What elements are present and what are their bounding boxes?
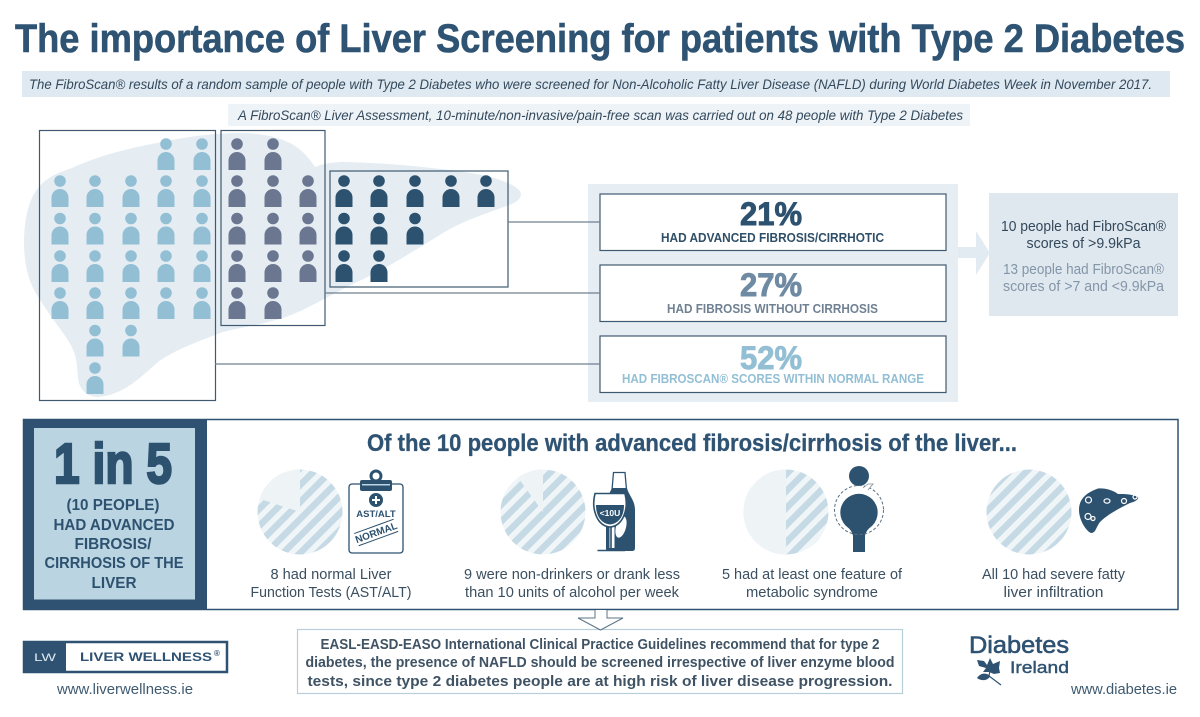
caption (982, 567, 1126, 601)
item: normal liver function tests (250, 470, 412, 601)
Diabetes Ireland URL: www.diabetes.ie (1070, 682, 1177, 698)
advanced fibrosis section frame (24, 420, 1178, 610)
item: alcohol (464, 469, 680, 601)
result: 21%: HAD ADVANCED FIBROSIS/CIRRHOTIC (661, 230, 885, 245)
1 in 5 panel: (10 PEOPLE) (66, 497, 160, 514)
1 in 5 panel: FIBROSIS/ (74, 536, 152, 553)
caption: 8 had normal Liver (270, 567, 392, 583)
icon: clipboard: NORMAL (354, 521, 399, 546)
FibroScan score box (989, 193, 1178, 316)
FibroScan score box: 13 people had FibroScan® (1003, 262, 1164, 278)
result: 21%: 21% (740, 196, 802, 232)
guidelines callout (298, 610, 902, 694)
caption (722, 567, 903, 601)
1 in 5 panel: LIVER (92, 575, 137, 592)
icon: fatty liver (1079, 488, 1138, 533)
1 in 5 panel: CIRRHOSIS OF THE (44, 555, 184, 572)
result: 52%: HAD FIBROSCAN® SCORES WITHIN NORMAL RANGE (622, 371, 924, 386)
guidelines callout: tests, since type 2 diabetes people are at high risk of liver disease progression. (308, 674, 892, 690)
icon: wine glass and bottle: <10U (600, 508, 620, 518)
logo: Diabetes Ireland: Diabetes (969, 632, 1069, 659)
subtitle band (22, 71, 1170, 97)
1 in 5 panel: 1 in 5 (54, 432, 172, 496)
guidelines callout: EASL-EASD-EASO International Clinical Practice Guidelines recommend that for type 2 (320, 637, 880, 653)
FibroScan score box: scores of >9.9kPa (1026, 236, 1141, 252)
group box: fibrosis people (221, 130, 325, 326)
logo: Liver Wellness: LW (34, 652, 57, 664)
pie: 9 of 10 (500, 469, 586, 554)
logo: Liver Wellness: ® (214, 649, 220, 658)
1 in 5 panel (23, 419, 207, 610)
result: 27% (600, 265, 946, 322)
guidelines callout: diabetes, the presence of NAFLD should be screened irrespective of liver enzyme blood (306, 655, 894, 671)
caption (464, 567, 680, 601)
assessment band: A FibroScan® Liver Assessment, 10-minute/non-invasive/pain-free scan was carried out on 48 people with Type 2 Diabetes (237, 107, 963, 123)
caption: 5 had at least one feature of (722, 567, 903, 583)
section heading: Of the 10 people with advanced fibrosis/cirrhosis of the liver... (367, 430, 1017, 457)
logo: Liver Wellness: LIVER WELLNESS (80, 652, 212, 664)
item: metabolic syndrome (722, 466, 903, 601)
caption: Function Tests (AST/ALT) (250, 585, 412, 601)
item: fatty liver (982, 470, 1138, 601)
caption (250, 567, 412, 601)
pie: 5 of 10 (744, 470, 828, 554)
result: 21% (600, 194, 946, 250)
icon: shamrock (977, 658, 1001, 685)
group box: advanced fibrosis people (330, 171, 508, 287)
logo: Diabetes Ireland (969, 632, 1069, 685)
result: 27%: 27% (740, 267, 802, 303)
icon: wine glass and bottle (594, 472, 635, 552)
result: 52%: 52% (740, 340, 802, 376)
connector lines (215, 222, 600, 364)
icon: body with waist measure (834, 466, 884, 552)
caption: liver infiltration (1004, 585, 1104, 601)
result: 52% (600, 336, 946, 392)
result: 27%: HAD FIBROSIS WITHOUT CIRRHOSIS (667, 301, 878, 316)
caption: metabolic syndrome (746, 585, 878, 601)
assessment band (228, 104, 970, 126)
results panel (588, 184, 958, 402)
FibroScan score box: 10 people had FibroScan® (1001, 219, 1166, 235)
logo: Liver Wellness (23, 641, 227, 673)
group box: normal range people (40, 130, 216, 400)
icon: clipboard (349, 471, 403, 553)
logo: Diabetes Ireland: Ireland (1010, 659, 1069, 677)
FibroScan score box: scores of >7 and <9.9kPa (1003, 279, 1165, 295)
subtitle band: The FibroScan® results of a random sample of people with Type 2 Diabetes who were screened for Non-Alcoholic Fatty Liver Disease (NAFLD) during World Diabetes Week in November 2017. (29, 76, 1152, 92)
pie: 8 of 10 (258, 470, 342, 554)
arrow to scores (958, 231, 990, 275)
liver silhouette (24, 133, 521, 397)
caption: 9 were non-drinkers or drank less (464, 567, 680, 583)
1 in 5 panel: HAD ADVANCED (54, 517, 174, 534)
Liver Wellness URL: www.liverwellness.ie (56, 682, 193, 698)
pie: 10 of 10 (986, 470, 1072, 554)
caption: than 10 units of alcohol per week (465, 585, 680, 601)
caption: All 10 had severe fatty (982, 567, 1126, 583)
icon: clipboard: AST/ALT (356, 509, 396, 520)
